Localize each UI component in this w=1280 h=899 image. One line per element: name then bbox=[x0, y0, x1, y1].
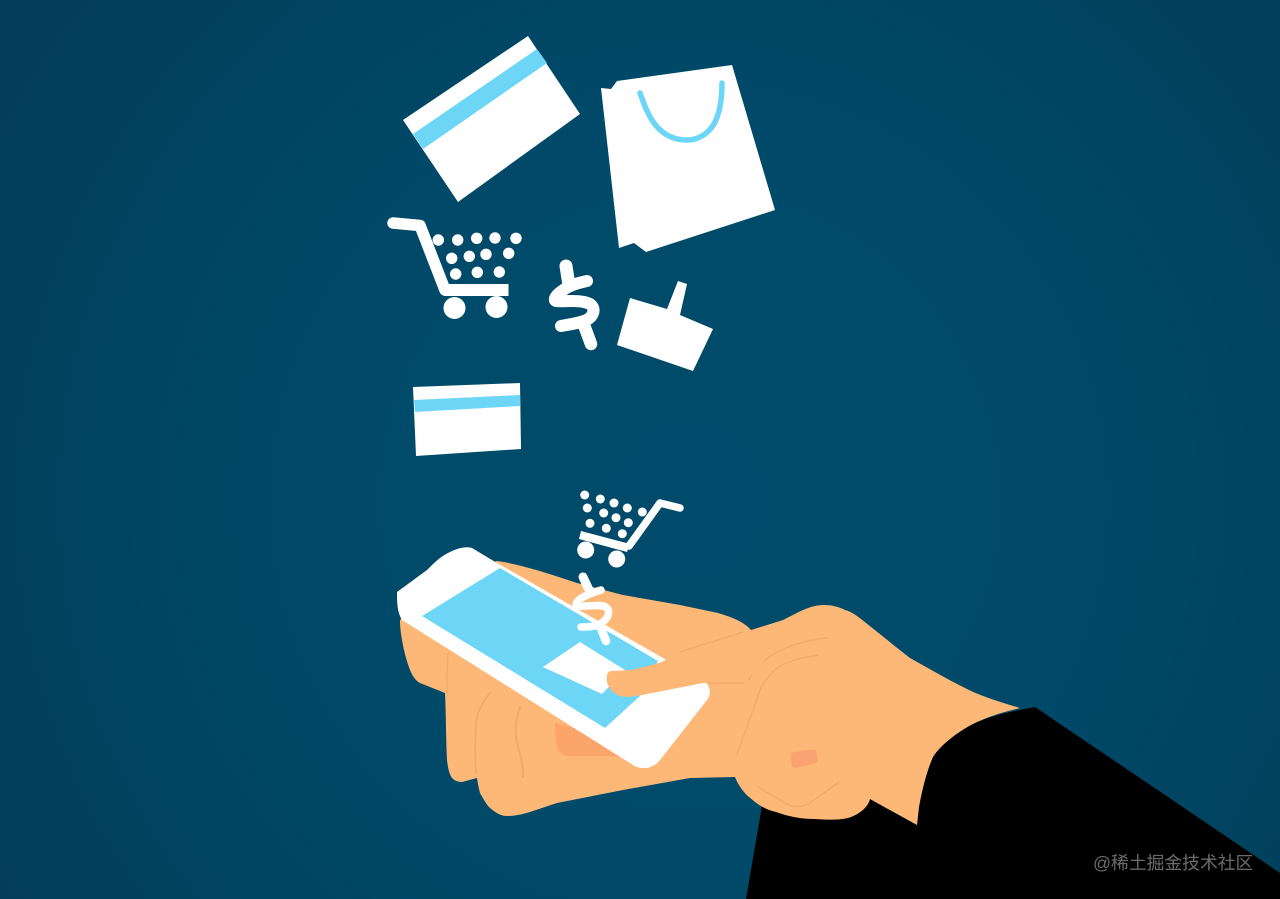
icon: small credit card bbox=[413, 383, 521, 456]
icon: small shopping cart bbox=[577, 490, 680, 568]
darker palm shadow bbox=[555, 723, 640, 760]
watermark: @稀土掘金技术社区 bbox=[1093, 853, 1253, 873]
icon: large dollar sign bbox=[555, 266, 594, 344]
phone bbox=[397, 547, 710, 768]
icon: small dollar sign bbox=[576, 577, 609, 641]
finger creases bbox=[680, 632, 743, 683]
knuckle patch bbox=[791, 750, 818, 768]
sleeve bbox=[746, 707, 1280, 899]
icon: shopping bag bbox=[601, 65, 775, 252]
phone screen bbox=[422, 568, 658, 728]
hand bbox=[400, 561, 1020, 825]
hand creases bbox=[447, 638, 839, 807]
icon: large shopping cart bbox=[393, 223, 522, 319]
pointing finger bbox=[607, 632, 765, 697]
icon: shopping basket bbox=[617, 281, 713, 371]
icon: large credit card bbox=[403, 36, 580, 202]
on-screen card bbox=[543, 642, 625, 694]
